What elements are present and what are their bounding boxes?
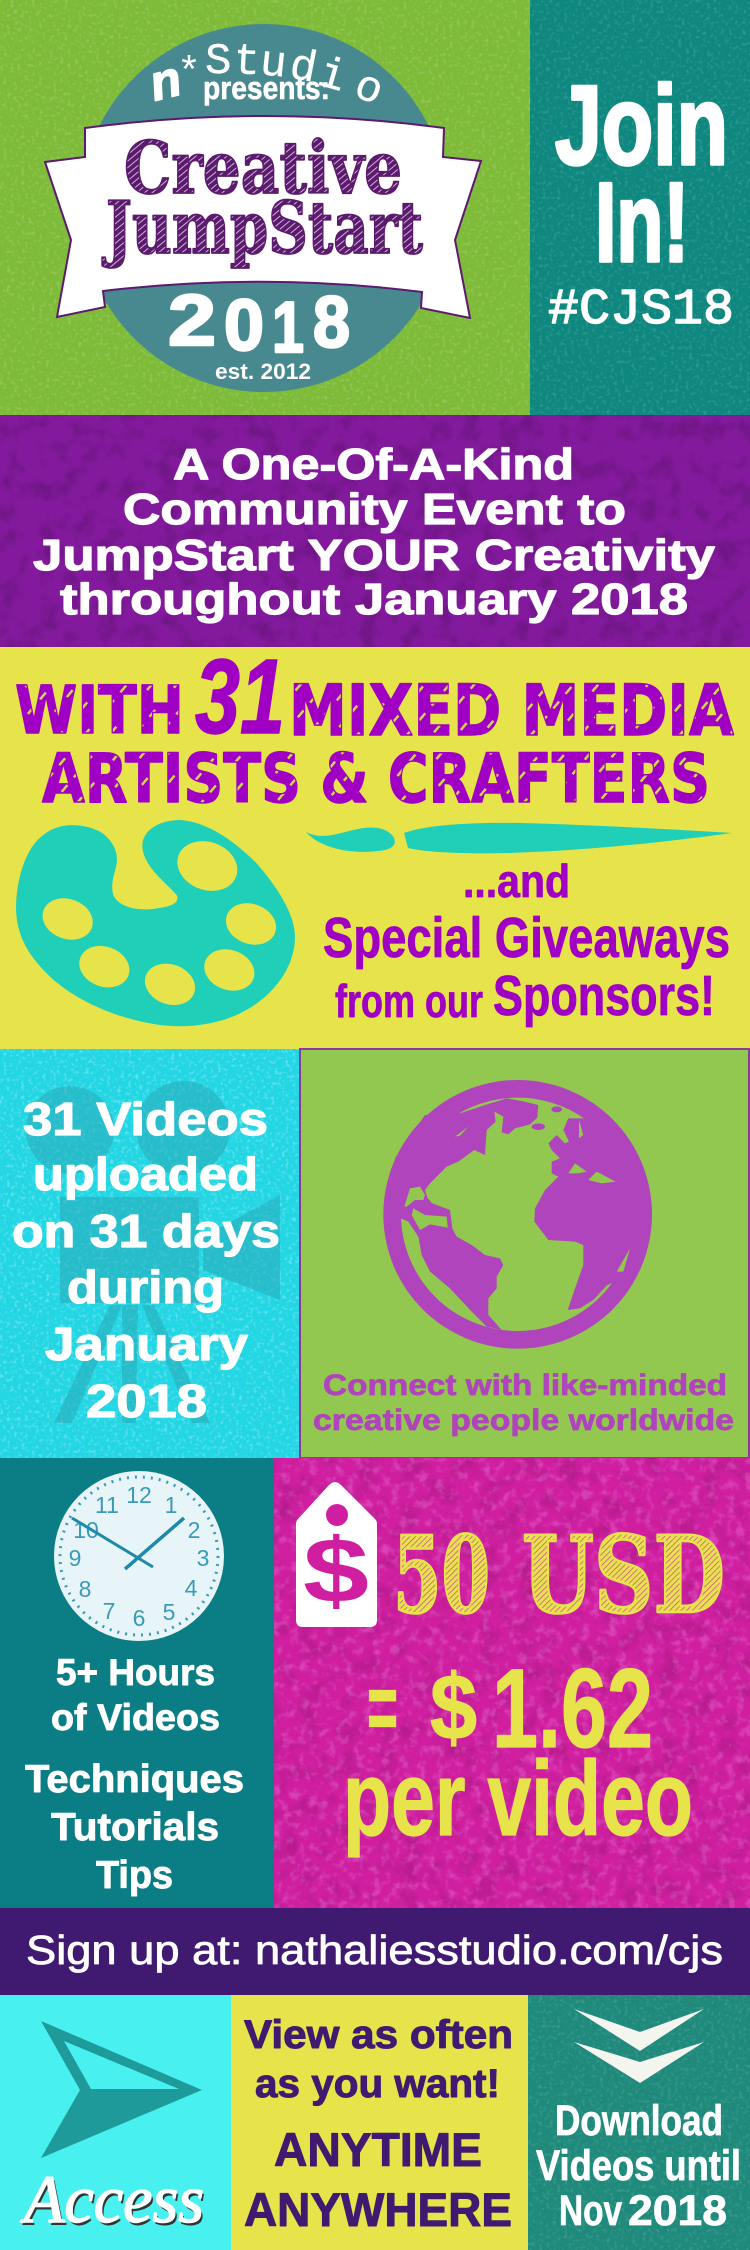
- text: 31 videos uploaded: 31 Videos: [23, 1093, 268, 1145]
- text: equals 1.62 per video: 1.62: [492, 1646, 653, 1771]
- icon: clock: 2: [188, 1517, 200, 1543]
- text: hashtag: #CJS18: [548, 282, 734, 339]
- logo badge circle: [80, 24, 448, 392]
- text: 2018: 8: [313, 283, 350, 363]
- text: Access: Access: [22, 2164, 206, 2240]
- panel: join in: [530, 0, 750, 415]
- icon: globe: [383, 1080, 652, 1349]
- panel: one-of-a-kind headline: [0, 415, 750, 647]
- text: 31 videos uploaded: [12, 1093, 280, 1427]
- text: 50 USD: [393, 1512, 725, 1637]
- text: Creative: Creative: [124, 125, 402, 210]
- text: hours and tips: Techniques: [25, 1758, 244, 1801]
- text: 2018: 1: [272, 288, 304, 368]
- text: JumpStart: JumpStart: [101, 185, 423, 270]
- text: presents: presents:: [203, 70, 330, 106]
- icon: paint brush: [306, 823, 732, 853]
- panel: view as often: [231, 1995, 528, 2250]
- text: Access: Access: [20, 2161, 204, 2237]
- banner: [45, 116, 481, 318]
- text: 31 videos uploaded: uploaded: [33, 1148, 258, 1200]
- panel: hours of videos: [0, 1458, 274, 1908]
- text: and special giveaways from our sponsors: [323, 855, 730, 1028]
- text: download until: [536, 2097, 741, 2235]
- text: hours and tips: of Videos: [51, 1697, 220, 1738]
- text: connect with like-minded: [313, 1369, 734, 1437]
- text: 31 videos uploaded: during: [67, 1261, 224, 1313]
- text: download until: Nov: [559, 2187, 622, 2235]
- heading: with 31 mixed media artists and crafters: WITH: [15, 672, 184, 749]
- icon: clock: 11: [95, 1492, 119, 1518]
- text: 31 videos uploaded: 2018: [86, 1375, 207, 1427]
- panel: price: [274, 1458, 750, 1908]
- text: equals 1.62 per video: =: [367, 1654, 398, 1761]
- text: hours and tips: 5+ Hours: [56, 1652, 215, 1693]
- icon: clock: 3: [197, 1545, 209, 1571]
- headline text: A One-Of-A-Kind: [173, 440, 574, 489]
- panel: connect worldwide: [300, 1049, 749, 1458]
- panel: 31 videos: [0, 1049, 299, 1458]
- text: 50 USD: 50: [393, 1512, 490, 1637]
- text: and special giveaways from our sponsors: from our: [335, 975, 483, 1027]
- headline text: Community Event to: [123, 485, 626, 534]
- panel: download: [528, 1995, 750, 2250]
- panel: artists and giveaways: [0, 638, 750, 1049]
- heading: with 31 mixed media artists and crafters: [15, 638, 734, 819]
- text: n*Studio: o: [347, 62, 390, 118]
- text: n*Studio: [144, 37, 390, 118]
- icon: clock: 4: [185, 1575, 198, 1601]
- icon: clock: [54, 1471, 224, 1641]
- text: 2018: [168, 281, 350, 368]
- text: view anytime anywhere: as you want!: [255, 2062, 500, 2106]
- text: In!: In!: [595, 160, 689, 285]
- icon: double chevron: [574, 2009, 704, 2083]
- icon: clock: 5: [163, 1599, 175, 1625]
- icon: price tag: [296, 1482, 377, 1627]
- headline text: throughout January 2018: [60, 575, 688, 624]
- text: 31 videos uploaded: on 31 days: [12, 1205, 280, 1257]
- icon: clock: 9: [69, 1545, 81, 1571]
- text: download until: 2018: [628, 2187, 727, 2235]
- icon: clock: 1: [165, 1492, 177, 1518]
- text: hours and tips: Tutorials: [51, 1806, 219, 1849]
- text: equals 1.62 per video: [343, 1646, 693, 1858]
- text: n*Studio: n: [144, 50, 187, 112]
- icon: clock: 6: [133, 1605, 145, 1631]
- text: 2018: 0: [224, 286, 264, 366]
- text: n*Studio: u: [258, 38, 289, 91]
- icon: paint palette: [16, 820, 295, 1026]
- text: view anytime anywhere: ANYWHERE: [244, 2183, 512, 2236]
- text: est. 2012: est. 2012: [215, 359, 311, 384]
- headline text: JumpStart YOUR Creativity: [33, 531, 716, 580]
- text: n*Studio: i: [312, 49, 351, 105]
- text: n*Studio: S: [205, 37, 231, 87]
- text: and special giveaways from our sponsors: ...and: [463, 855, 570, 907]
- icon: clock: 12: [126, 1482, 152, 1508]
- text: sign up url: Sign up at: nathaliesstudio.com/cjs: [26, 1927, 723, 1973]
- heading: with 31 mixed media artists and crafters: 31: [195, 638, 285, 756]
- icon: arrow: [41, 2021, 202, 2158]
- text: connect with like-minded: Connect with like-minded: [323, 1369, 727, 1402]
- panel: access: [0, 1995, 231, 2250]
- icon: price tag: $: [303, 1520, 369, 1622]
- text: n*Studio: t: [232, 37, 261, 88]
- text: n*Studio: *: [177, 52, 201, 97]
- text: view anytime anywhere: [244, 2013, 513, 2236]
- headline text: [33, 440, 716, 624]
- text: 2018: 2: [168, 281, 216, 361]
- text: hours and tips: Tips: [96, 1854, 173, 1897]
- icon: clock: 8: [79, 1576, 91, 1602]
- icon: clock: 7: [103, 1598, 115, 1624]
- text: n*Studio: d: [285, 42, 321, 96]
- panel: sign up bar: [0, 1908, 750, 1995]
- text: connect with like-minded: creative people worldwide: [313, 1404, 734, 1437]
- text: 31 videos uploaded: January: [45, 1318, 248, 1370]
- text: view anytime anywhere: ANYTIME: [274, 2123, 482, 2176]
- icon: clock: 10: [73, 1517, 99, 1543]
- icon: film camera silhouette: [26, 1081, 280, 1423]
- text: view anytime anywhere: View as often: [244, 2013, 513, 2057]
- panel: logo on green: [0, 0, 530, 415]
- text: hours and tips: [25, 1652, 244, 1897]
- text: equals 1.62 per video: $: [430, 1655, 477, 1759]
